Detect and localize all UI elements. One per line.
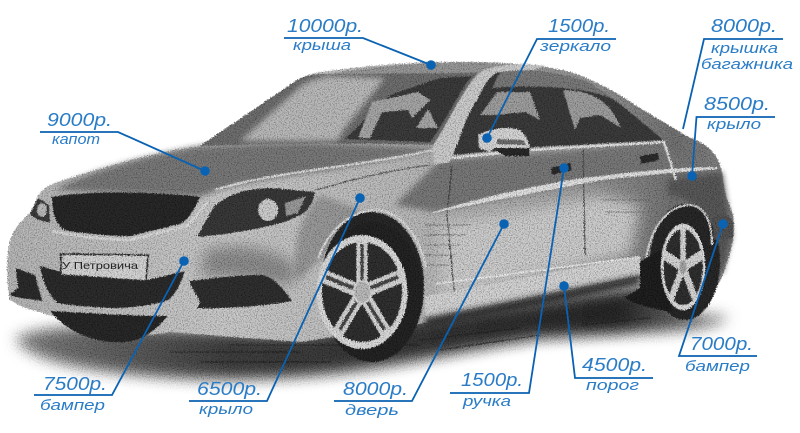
right fog lamp xyxy=(190,275,292,308)
label: переднее крыло: 6500р. xyxy=(197,379,262,399)
label: крышка багажника: крышка xyxy=(711,40,778,57)
door handles xyxy=(551,153,659,175)
rear bumper xyxy=(712,215,733,240)
rear quarter shading xyxy=(668,172,732,275)
side upper door shading xyxy=(395,145,700,212)
windshield dark xyxy=(345,76,472,142)
plate text: У Петровича xyxy=(62,260,138,272)
lower door highlight xyxy=(440,195,640,298)
lower intake xyxy=(40,266,185,308)
headlight reflector xyxy=(285,196,306,216)
label: крышка багажника xyxy=(683,16,793,129)
roof xyxy=(297,62,590,80)
front rim xyxy=(316,235,408,349)
label: заднее крыло xyxy=(687,94,775,181)
left headlight xyxy=(30,198,50,222)
label: передний бампер xyxy=(34,256,189,414)
label: переднее крыло: крыло xyxy=(199,401,253,418)
label: крышка багажника: 8000р. xyxy=(711,16,777,36)
front arch highlight xyxy=(318,210,426,268)
left headlight lens xyxy=(37,203,47,217)
label: переднее крыло xyxy=(189,193,365,418)
label: порог: порог xyxy=(586,377,640,394)
hood shading xyxy=(55,142,440,197)
rear rim xyxy=(661,224,705,310)
front fender shading xyxy=(295,195,360,280)
lower door streaks xyxy=(425,200,650,265)
rear arch highlight xyxy=(646,205,712,260)
headlight xyxy=(197,188,315,237)
label: ручка: ручка xyxy=(462,393,511,410)
grille frame xyxy=(52,202,208,240)
label: крыша xyxy=(284,16,436,70)
hood crease xyxy=(215,150,433,190)
front fender crease xyxy=(316,165,430,190)
label: задний бампер xyxy=(679,219,757,375)
window mid tone xyxy=(492,70,655,133)
windshield reflection xyxy=(240,76,385,141)
label: дверь: дверь xyxy=(345,402,399,419)
grille xyxy=(52,192,200,236)
label: капот: 9000р. xyxy=(47,110,112,130)
label: зеркало xyxy=(482,16,616,143)
front tire xyxy=(322,222,422,362)
label: ручка xyxy=(450,163,569,410)
front wheel arch xyxy=(320,212,424,362)
a-pillar xyxy=(433,64,545,165)
label: капот xyxy=(40,110,210,176)
window reflection xyxy=(480,90,621,130)
sill xyxy=(425,256,642,318)
car illustration xyxy=(7,62,734,379)
label: порог: 4500р. xyxy=(582,355,647,375)
lower front shading xyxy=(200,246,300,285)
sill line xyxy=(435,257,640,284)
mudflap xyxy=(625,250,672,312)
rear arch xyxy=(650,204,720,320)
windshield seats xyxy=(358,92,438,138)
ground shadow xyxy=(16,285,728,379)
windshield xyxy=(200,73,478,146)
label: передний бампер: бампер xyxy=(40,397,105,414)
label: крыша: крыша xyxy=(293,37,351,54)
label: капот: капот xyxy=(52,131,100,148)
label: задний бампер: бампер xyxy=(685,358,750,375)
side window xyxy=(453,70,663,155)
belt line xyxy=(452,142,676,180)
label: дверь xyxy=(334,219,509,419)
license plate xyxy=(61,254,148,281)
chin xyxy=(50,311,168,342)
character line xyxy=(433,167,717,213)
label: крыша: 10000р. xyxy=(287,16,363,36)
label: зеркало: зеркало xyxy=(539,38,611,55)
mirror stripe xyxy=(497,139,526,145)
label: порог xyxy=(559,281,653,394)
sill shadow xyxy=(425,275,640,330)
headlight lens xyxy=(258,199,278,221)
car body xyxy=(7,62,734,342)
label: передний бампер: 7500р. xyxy=(43,374,107,394)
label: зеркало: 1500р. xyxy=(548,16,610,36)
label: дверь: 8000р. xyxy=(343,379,408,399)
shadow streaks xyxy=(170,318,650,362)
mirror xyxy=(478,128,529,152)
label: крышка багажника: багажника xyxy=(701,56,793,73)
label: заднее крыло: крыло xyxy=(707,116,761,133)
mirror shadow xyxy=(494,148,530,156)
door lines xyxy=(447,150,585,300)
label: заднее крыло: 8500р. xyxy=(704,94,770,114)
label: ручка: 1500р. xyxy=(461,370,523,390)
label: задний бампер: 7000р. xyxy=(690,334,753,354)
left fog lamp xyxy=(9,268,42,301)
